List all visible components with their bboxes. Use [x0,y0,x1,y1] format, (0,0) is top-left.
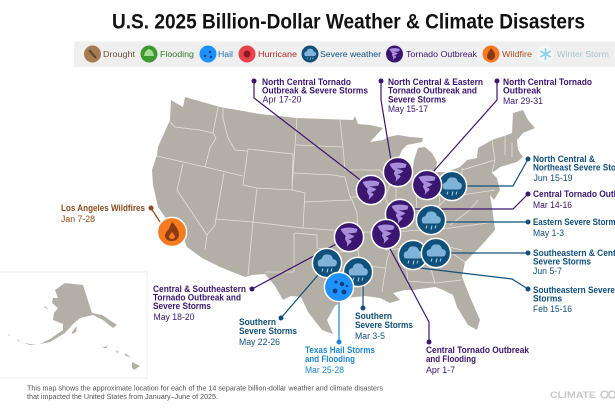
label: Southern Severe Storms Mar 3-5: Severe Storms [355,320,413,330]
label: North Central Tornado Outbreak & Severe Storms: North Central Tornado [262,77,351,87]
label: Southern Severe Storms May 22-26 [239,316,297,347]
legend item: severe weather [302,46,381,62]
connector lines [151,81,528,342]
label: Central Tornado Outbreak [526,189,615,210]
marker: tornado Apr 17-20 [356,175,386,205]
label: Eastern Severe Storms [526,217,615,238]
label: North Central Tornado Outbreak [494,77,592,106]
label: Central & Southeastern Tornado Outbreak and Severe Storms: Severe Storms [153,301,211,311]
label: Los Angeles Wildfires: Los Angeles Wildfires [61,203,145,213]
label: North Central Tornado Outbreak: Outbreak [503,86,542,96]
logo: Climate Central: CLIMATE [550,390,596,400]
inset panel: Alaska and Hawaii [0,272,147,378]
label: North Central & Eastern Tornado Outbreak and Severe Storms: North Central & Eastern [388,77,483,87]
legend item: flooding [140,46,194,62]
label: North Central & Eastern Tornado Outbreak and Severe Storms [378,77,483,114]
legend item: hurricane [238,46,297,62]
legend item: drought [84,46,136,62]
marker: tornado May 15-17 [383,157,413,187]
legend item: tornado outbreak: Tornado Outbreak [406,49,478,59]
legend item: wildfire [482,46,532,62]
label: Central & Southeastern Tornado Outbreak and Severe Storms: May 18-20 [154,312,194,322]
marker: tornado Mar 29-31 [412,170,442,200]
label: Texas Hail Storms and Flooding: Texas Hail Storms [305,345,375,355]
legend item: flooding: Flooding [160,49,194,59]
label: North Central Tornado Outbreak & Severe Storms: Outbreak & Severe Storms [262,86,368,96]
Hawaii [102,346,140,370]
marker: severe Jun 15-19 [437,171,467,201]
legend item: hurricane: Hurricane [258,49,297,59]
label: North Central & Eastern Tornado Outbreak and Severe Storms: May 15-17 [388,104,428,114]
label: Central Tornado Outbreak: Mar 14-16 [533,200,572,210]
label: Southern Severe Storms May 22-26: Southern [239,317,276,327]
label: North Central Tornado Outbreak: Mar 29-31 [503,96,543,106]
label: North Central & Northeast Severe Storms: Jun 15-19 [534,173,572,183]
label: Central Tornado Outbreak and Flooding: Central Tornado Outbreak [426,345,530,355]
label: Los Angeles Wildfires: Jan 7-28 [61,214,95,224]
legend item: winter storm: Winter Storm [557,49,609,59]
label: Southern Severe Storms Mar 3-5: Southern [355,311,392,321]
marker: wildfire Jan 7-28 [157,217,187,247]
legend [74,42,615,67]
legend item: severe weather: Severe weather [320,49,381,59]
marker: severe May 22-26 [312,248,342,278]
label: Southern Severe Storms Mar 3-5: Mar 3-5 [355,331,385,341]
label: Southeastern Severe Storms: Feb 15-16 [533,304,572,314]
legend item: drought: Drought [103,49,136,59]
label: Southeastern Severe Storms: Storms [533,294,562,304]
legend item: hail [200,46,233,62]
marker: severe Mar 3-5 [343,257,373,287]
label: North Central Tornado Outbreak & Severe Storms: Apr 17-20 [262,94,302,104]
label: Central & Southeastern Tornado Outbreak and Severe Storms: Tornado Outbreak and [153,292,241,302]
label: Central Tornado Outbreak and Flooding: Apr 1-7 [426,365,455,375]
label: Texas Hail Storms and Flooding: and Flooding [305,354,355,364]
label: Eastern Severe Storms: May 1-3 [533,228,564,238]
label: North Central Tornado Outbreak & Severe Storms [252,77,368,104]
label: North Central & Eastern Tornado Outbreak and Severe Storms: Tornado Outbreak and [388,86,477,96]
label: Central & Southeastern Tornado Outbreak and Severe Storms: Central & Southeastern [153,284,246,294]
marker: tornado Apr 1-7 [371,219,401,249]
label: Central & Southeastern Tornado Outbreak and Severe Storms [153,284,254,322]
label: North Central Tornado Outbreak: North Central Tornado [503,77,592,87]
label: North Central & Northeast Severe Storms [526,154,615,183]
footnote [27,384,383,401]
label: Central Tornado Outbreak and Flooding [426,340,530,375]
label: Southeastern & Central Severe Storms: Jun 5-7 [533,266,562,276]
marker: severe Feb 15-16 [398,240,428,270]
label: Southeastern & Central Severe Storms: Severe Storms [533,256,591,266]
label: Central Tornado Outbreak and Flooding: and Flooding [426,354,476,364]
Alaska [8,283,117,345]
label: Southern Severe Storms May 22-26: Severe Storms [239,326,297,336]
label: Southeastern & Central Severe Storms [526,248,615,276]
marker: tornado May 18-20 [334,222,364,252]
legend item: winter storm [537,46,609,62]
label: Southern Severe Storms May 22-26: May 22-26 [239,337,280,347]
label: North Central & Northeast Severe Storms: North Central & [533,154,595,164]
footnote: that impacted the United States from January–June of 2025. [27,392,218,401]
label: Southern Severe Storms Mar 3-5 [355,306,413,341]
legend item: wildfire: Wildfire [502,49,532,59]
marker: severe May 1-3 [416,205,446,235]
marker: hail Mar 25-28 [324,272,354,302]
marker: tornado Mar 14-16 [385,199,415,229]
legend item: tornado outbreak [386,46,478,62]
legend item: hail: Hail [218,49,233,59]
logo: Climate Central [550,390,615,400]
label: Southeastern Severe Storms [526,285,615,314]
footnote: This map shows the approximate location for each of the 14 separate billion-dollar weather and climate disasters [27,384,383,392]
map: contiguous United States [152,97,535,334]
label: Texas Hail Storms and Flooding: Mar 25-28 [305,365,344,375]
label: Texas Hail Storms and Flooding [305,340,375,375]
label: Los Angeles Wildfires [61,203,154,224]
marker: severe Jun 5-7 [421,238,451,268]
label: North Central & Eastern Tornado Outbreak and Severe Storms: Severe Storms [388,94,446,104]
